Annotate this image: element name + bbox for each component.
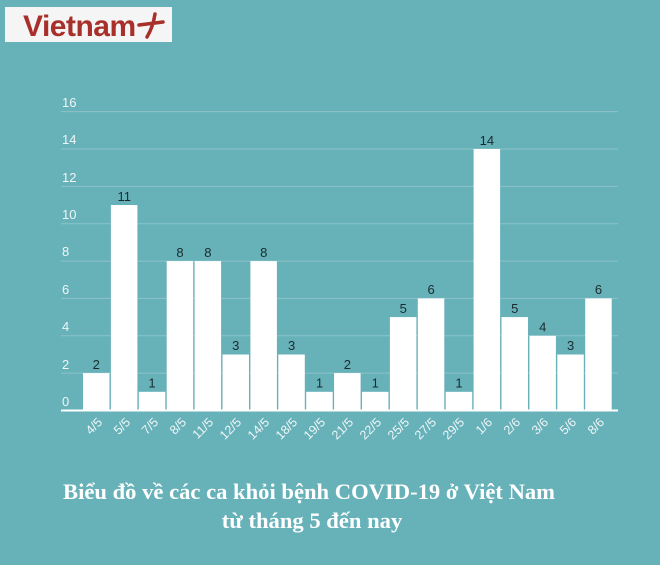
value labels: 2: [344, 357, 351, 372]
x axis: [61, 410, 618, 412]
x axis labels: [83, 415, 607, 442]
value labels: 1: [455, 376, 463, 390]
value labels: 3: [567, 338, 574, 353]
y axis labels: 8: [62, 244, 69, 259]
logo: Vietnam: [23, 10, 136, 43]
bar chart: [61, 95, 618, 442]
title: [63, 479, 555, 533]
x axis labels: 11/5: [190, 415, 216, 442]
value labels: 8: [176, 245, 184, 260]
x axis labels: 8/6: [585, 415, 607, 437]
x axis labels: 19/5: [301, 415, 328, 442]
value labels: 11: [117, 189, 131, 204]
logo: [5, 7, 172, 43]
y axis labels: 2: [62, 357, 69, 372]
x axis labels: 1/6: [473, 415, 495, 437]
x axis labels: 2/6: [501, 415, 523, 437]
value labels: [93, 133, 602, 390]
y axis labels: 6: [62, 282, 69, 297]
y axis labels: [62, 95, 76, 409]
x axis labels: 27/5: [412, 415, 439, 442]
x axis labels: 5/6: [557, 415, 579, 437]
value labels: 4: [539, 320, 546, 334]
value labels: 6: [427, 282, 435, 297]
x axis labels: 3/6: [529, 415, 551, 437]
x axis labels: 18/5: [273, 415, 300, 442]
value labels: 5: [511, 301, 518, 316]
x axis labels: 7/5: [139, 415, 161, 437]
value labels: 8: [204, 245, 212, 260]
x axis labels: 4/5: [83, 415, 105, 437]
y axis labels: 14: [62, 132, 76, 147]
x axis labels: 14/5: [245, 415, 272, 442]
value labels: 3: [232, 338, 239, 353]
title: từ tháng 5 đến nay: [222, 508, 403, 533]
x axis labels: 12/5: [217, 415, 244, 442]
y axis labels: 12: [62, 170, 76, 185]
x axis labels: 22/5: [357, 415, 384, 442]
value labels: 3: [288, 338, 295, 353]
value labels: 2: [93, 357, 100, 372]
x axis labels: 29/5: [440, 415, 467, 442]
value labels: 1: [148, 376, 156, 390]
bars: [83, 149, 612, 410]
y axis labels: 0: [62, 394, 69, 409]
value labels: 14: [480, 133, 494, 148]
title: Biểu đồ về các ca khỏi bệnh COVID-19 ở Việt Nam: [63, 479, 555, 504]
value labels: 8: [260, 245, 267, 260]
y axis labels: 4: [62, 319, 69, 334]
x axis labels: 5/5: [111, 415, 133, 437]
x axis labels: 21/5: [329, 415, 356, 442]
value labels: 6: [595, 282, 602, 297]
value labels: 5: [400, 301, 407, 316]
x axis labels: 8/5: [167, 415, 189, 437]
y axis labels: 16: [62, 95, 76, 110]
value labels: 1: [316, 376, 323, 390]
value labels: 1: [372, 376, 379, 390]
x axis labels: 25/5: [385, 415, 412, 442]
y axis labels: 10: [62, 207, 76, 222]
